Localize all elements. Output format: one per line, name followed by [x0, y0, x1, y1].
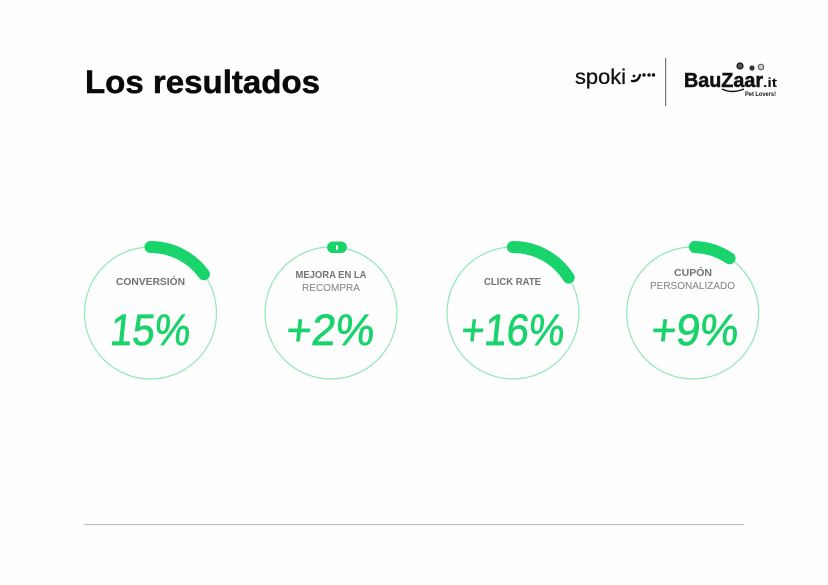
- logo divider: [665, 58, 666, 106]
- progress marker: [336, 245, 338, 250]
- label: CONVERSIÓN: [116, 275, 185, 288]
- logo: spoki: spoki: [575, 66, 626, 89]
- label second line: PERSONALIZADO: [650, 280, 735, 292]
- value: +16%: [459, 306, 567, 355]
- value: 15%: [108, 306, 193, 355]
- panel: mejora en la recompra: [265, 245, 397, 379]
- title: Los resultados: [85, 64, 320, 100]
- logo: spoki: [575, 66, 655, 89]
- ring: [447, 247, 579, 379]
- panel: conversión: [84, 247, 216, 379]
- label second line: RECOMPRA: [302, 282, 360, 294]
- logo: BauZaar.it: [684, 63, 778, 98]
- ring: [265, 247, 397, 379]
- label: CLICK RATE: [484, 276, 541, 288]
- ring: [627, 247, 759, 379]
- progress arc 16%: [513, 247, 569, 278]
- label: CUPÓN: [674, 266, 712, 279]
- label: MEJORA EN LA: [296, 269, 367, 281]
- progress arc 2%: [333, 242, 341, 253]
- panel: click rate: [447, 247, 579, 379]
- value: +9%: [649, 306, 741, 355]
- ring: [84, 247, 216, 379]
- logo: BauZaar.it: .it: [763, 75, 778, 90]
- value: +2%: [284, 306, 377, 355]
- panel: cupón personalizado: [627, 247, 759, 379]
- logo: BauZaar.it: Pet Lovers!: [745, 92, 776, 98]
- logo: BauZaar.it: BauZaar: [684, 69, 763, 92]
- logos: [575, 58, 778, 106]
- progress arc 15%: [150, 247, 204, 274]
- progress arc 9%: [695, 247, 730, 258]
